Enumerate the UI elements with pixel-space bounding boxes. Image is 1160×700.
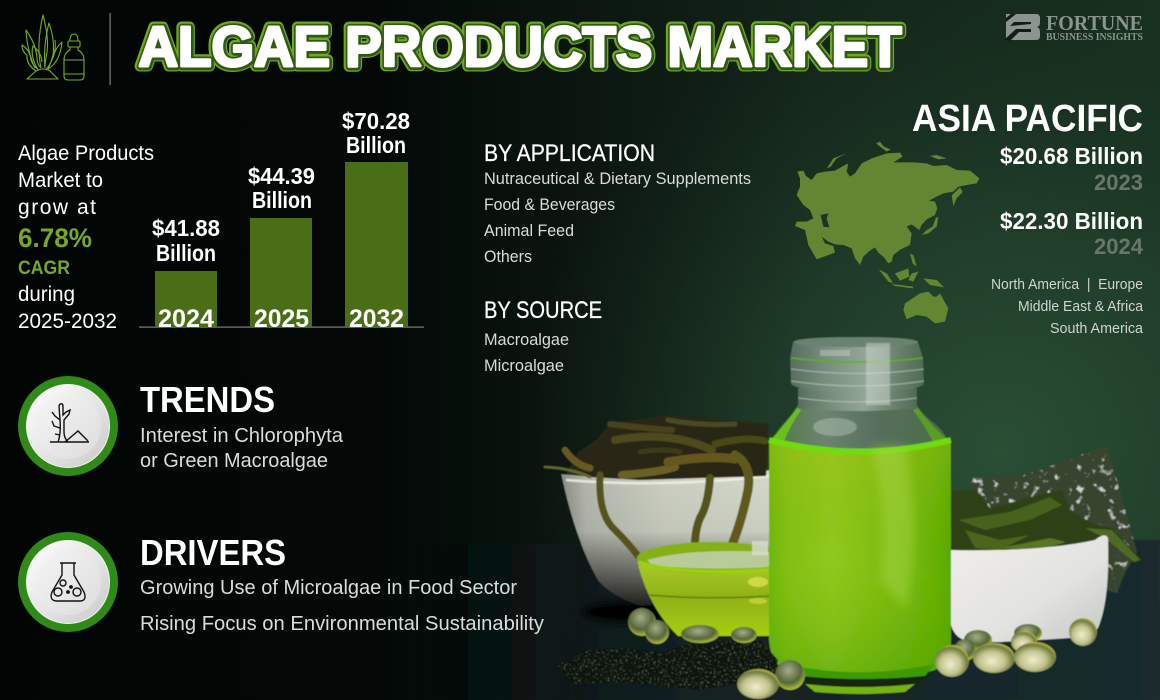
CAGR text block: CAGR <box>18 258 70 279</box>
bottle of green liquid <box>769 337 951 694</box>
region: Asia Pacific: 2023 <box>1094 170 1143 195</box>
title: ALGAE PRODUCTS MARKET <box>139 16 902 80</box>
right white bowl <box>950 535 1108 642</box>
bar 2032: 2032 <box>349 305 404 333</box>
other regions: South America <box>1050 320 1144 337</box>
bar 2032: $70.28 <box>342 108 410 134</box>
logo icon: seaweed and bottle <box>22 15 84 80</box>
seaweed in right bowl <box>950 490 1142 562</box>
bar 2025: $44.39 <box>248 163 315 189</box>
segment: by source: Macroalgae <box>484 330 569 349</box>
seaweed in left bowl <box>545 415 768 556</box>
segment: by application: Nutraceutical & Dietary Supplements <box>484 169 751 188</box>
bar 2025: 2025 <box>254 305 309 333</box>
bottle mouth <box>790 337 924 392</box>
region: Asia Pacific: $20.68 Billion <box>1000 143 1143 169</box>
segment: by application <box>484 140 751 266</box>
trends icon <box>18 376 118 476</box>
header divider <box>110 13 111 85</box>
bottle neck <box>798 388 917 411</box>
brand logo: Fortune Business Insights <box>1004 11 1143 43</box>
nori on table <box>557 640 778 690</box>
left white bowl <box>561 470 770 605</box>
bar 2032 <box>342 108 410 333</box>
logo wordmark: FORTUNE <box>1046 11 1143 35</box>
drivers text <box>140 532 544 635</box>
segment: by source <box>484 297 602 375</box>
logo mark <box>1004 14 1040 41</box>
bottle liquid <box>769 441 951 675</box>
table surface <box>400 540 1160 700</box>
bar 2024: 2024 <box>158 305 214 333</box>
drivers text: Growing Use of Microalgae in Food Sector <box>140 577 517 599</box>
segment: by source: Microalgae <box>484 356 564 375</box>
CAGR text block: during <box>18 283 75 306</box>
other regions: North America | Europe <box>991 276 1143 293</box>
region: Asia Pacific: $22.30 Billion <box>1000 208 1143 234</box>
small glass bowl of green oil <box>637 541 787 636</box>
left bowl shadow <box>580 602 680 622</box>
other regions: Middle East & Africa <box>1018 298 1144 315</box>
trends text: Interest in Chlorophyta <box>140 425 344 447</box>
CAGR text block: 6.78% <box>18 223 92 253</box>
CAGR text block: Market to <box>18 169 103 192</box>
segment: by application: Others <box>484 247 532 266</box>
segment: by application: Food & Beverages <box>484 195 615 214</box>
title: ALGAE PRODUCTS MARKET <box>138 15 902 79</box>
trends text <box>140 379 344 472</box>
icon: dropper bottle <box>64 34 84 80</box>
segment: by source: BY SOURCE <box>484 297 602 324</box>
region: Asia Pacific <box>912 98 1144 259</box>
bar 2024 <box>152 215 220 333</box>
segment: by application: BY APPLICATION <box>484 140 655 167</box>
CAGR text block: grow at <box>18 196 96 219</box>
bar 2024: Billion <box>156 240 216 266</box>
title: ALGAE PRODUCTS MARKET <box>138 15 902 79</box>
nori sheet behind right bowl <box>960 445 1137 593</box>
oil capsules <box>628 608 1097 699</box>
CAGR text block: Algae Products <box>18 142 154 165</box>
bar chart <box>139 108 424 333</box>
drivers icon <box>18 532 118 632</box>
bar 2032: Billion <box>346 132 406 158</box>
bottle glass shoulder <box>769 405 951 455</box>
icon: seaweed <box>22 15 62 79</box>
drivers text: DRIVERS <box>140 532 286 573</box>
brand logo: Fortune Business Insights: BUSINESS INSIGHTS <box>1046 32 1143 43</box>
bar 2025: Billion <box>252 187 312 213</box>
bar 2025 <box>248 163 315 333</box>
drivers text: Rising Focus on Environmental Sustainability <box>140 613 544 635</box>
photo: algae products still life <box>400 337 1160 700</box>
trends text: TRENDS <box>140 379 275 420</box>
segment: by application: Animal Feed <box>484 221 574 240</box>
map: Asia Pacific <box>795 142 979 323</box>
other regions <box>991 276 1144 337</box>
bar 2024: $41.88 <box>152 215 220 241</box>
trends text: or Green Macroalgae <box>140 450 328 472</box>
CAGR text block <box>18 142 154 333</box>
CAGR text block: 2025-2032 <box>18 310 117 333</box>
region: Asia Pacific: 2024 <box>1094 234 1144 259</box>
region: Asia Pacific: ASIA PACIFIC <box>912 98 1143 140</box>
